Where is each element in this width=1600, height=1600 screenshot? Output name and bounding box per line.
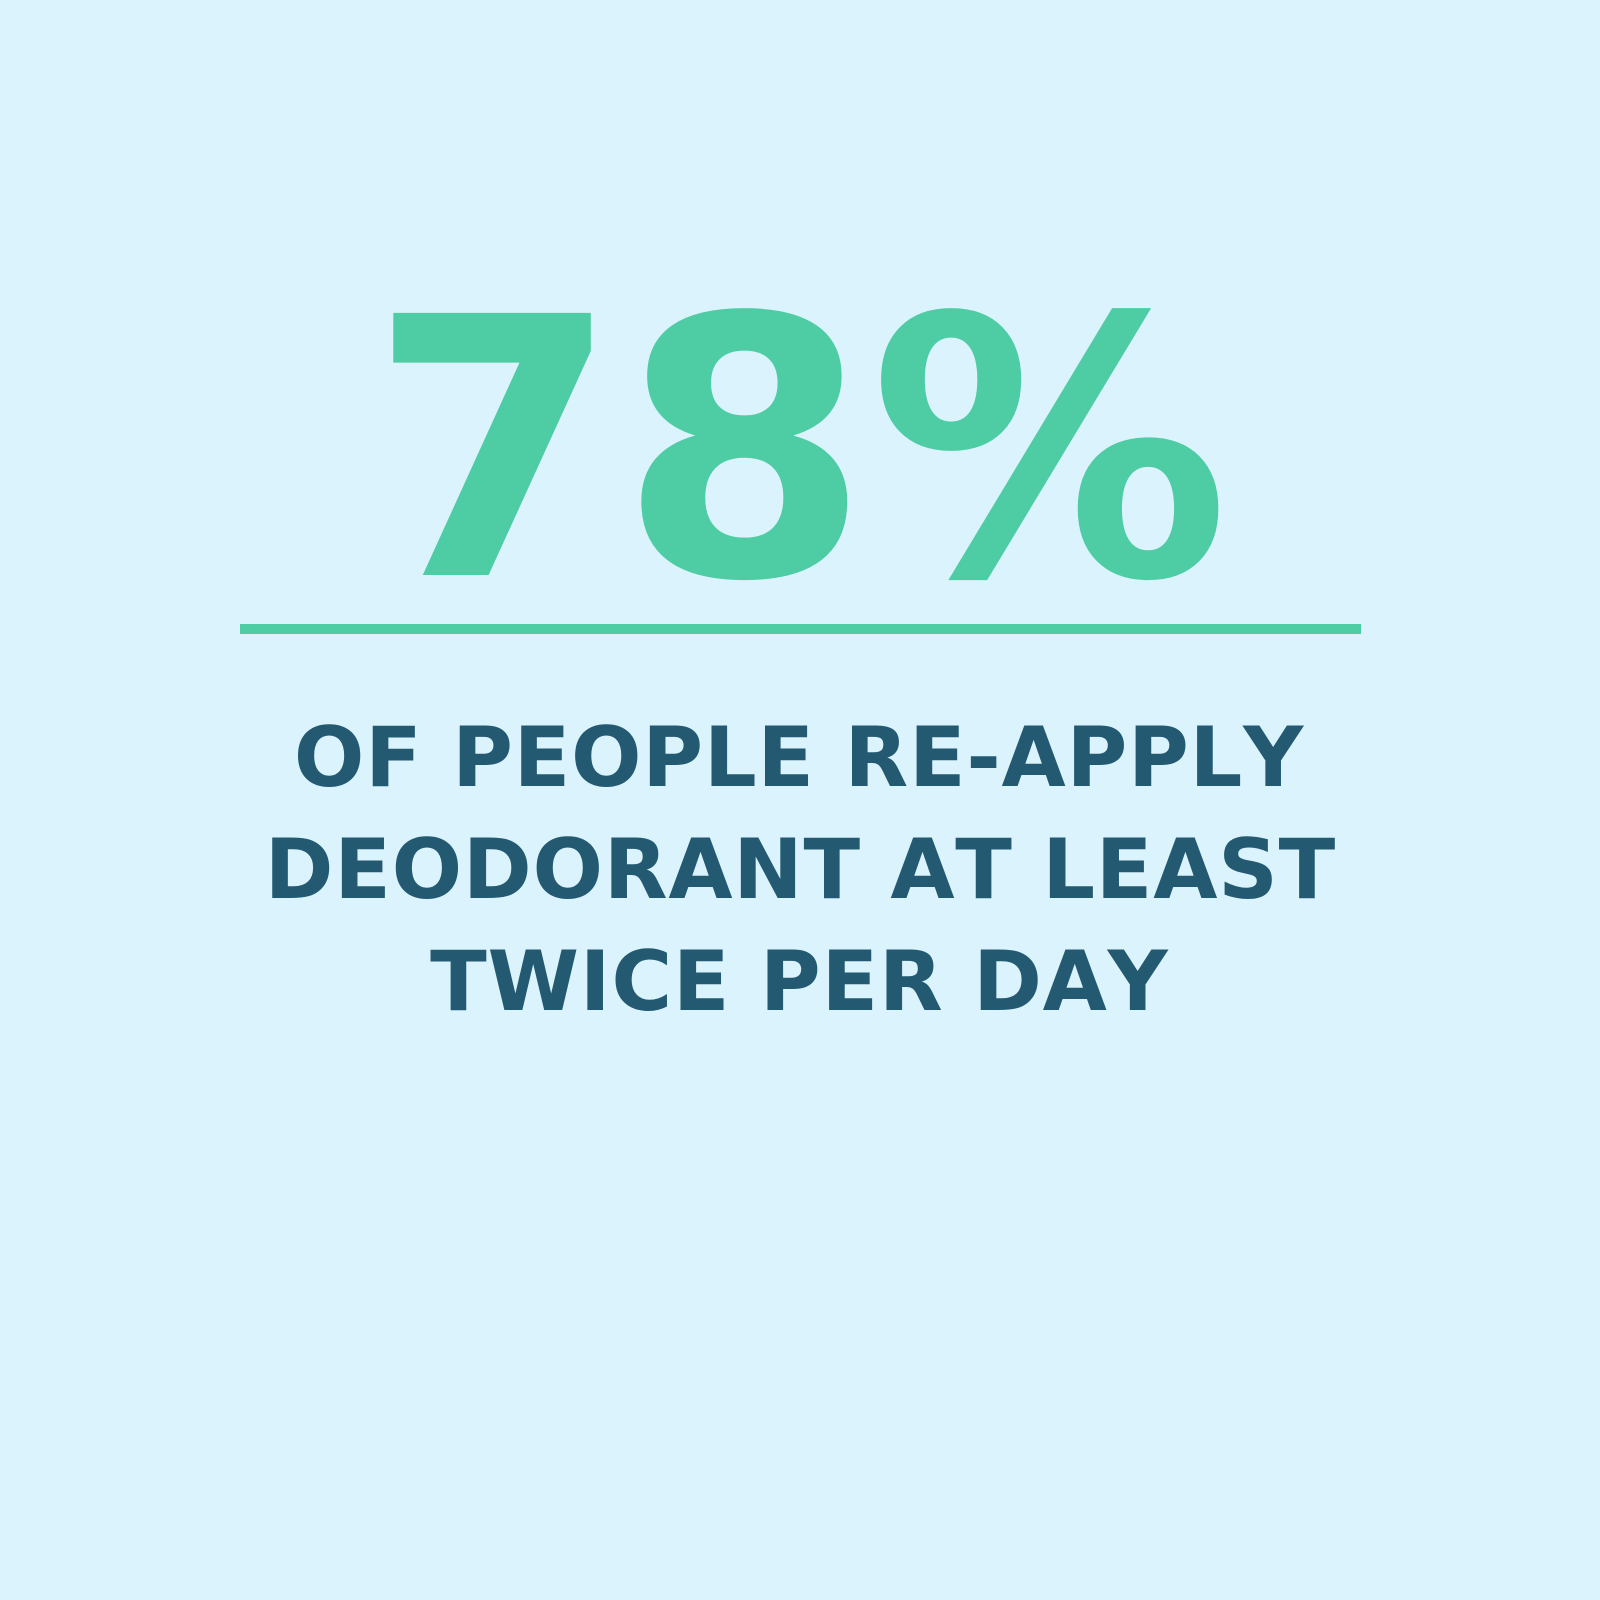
description text (265, 709, 1336, 1030)
description text: TWICE PER DAY (430, 933, 1169, 1030)
headline statistic: 78%: 78% (369, 241, 1230, 660)
description text: OF PEOPLE RE-APPLY (294, 709, 1304, 806)
description text: DEODORANT AT LEAST (265, 821, 1336, 918)
divider bar (240, 624, 1361, 634)
